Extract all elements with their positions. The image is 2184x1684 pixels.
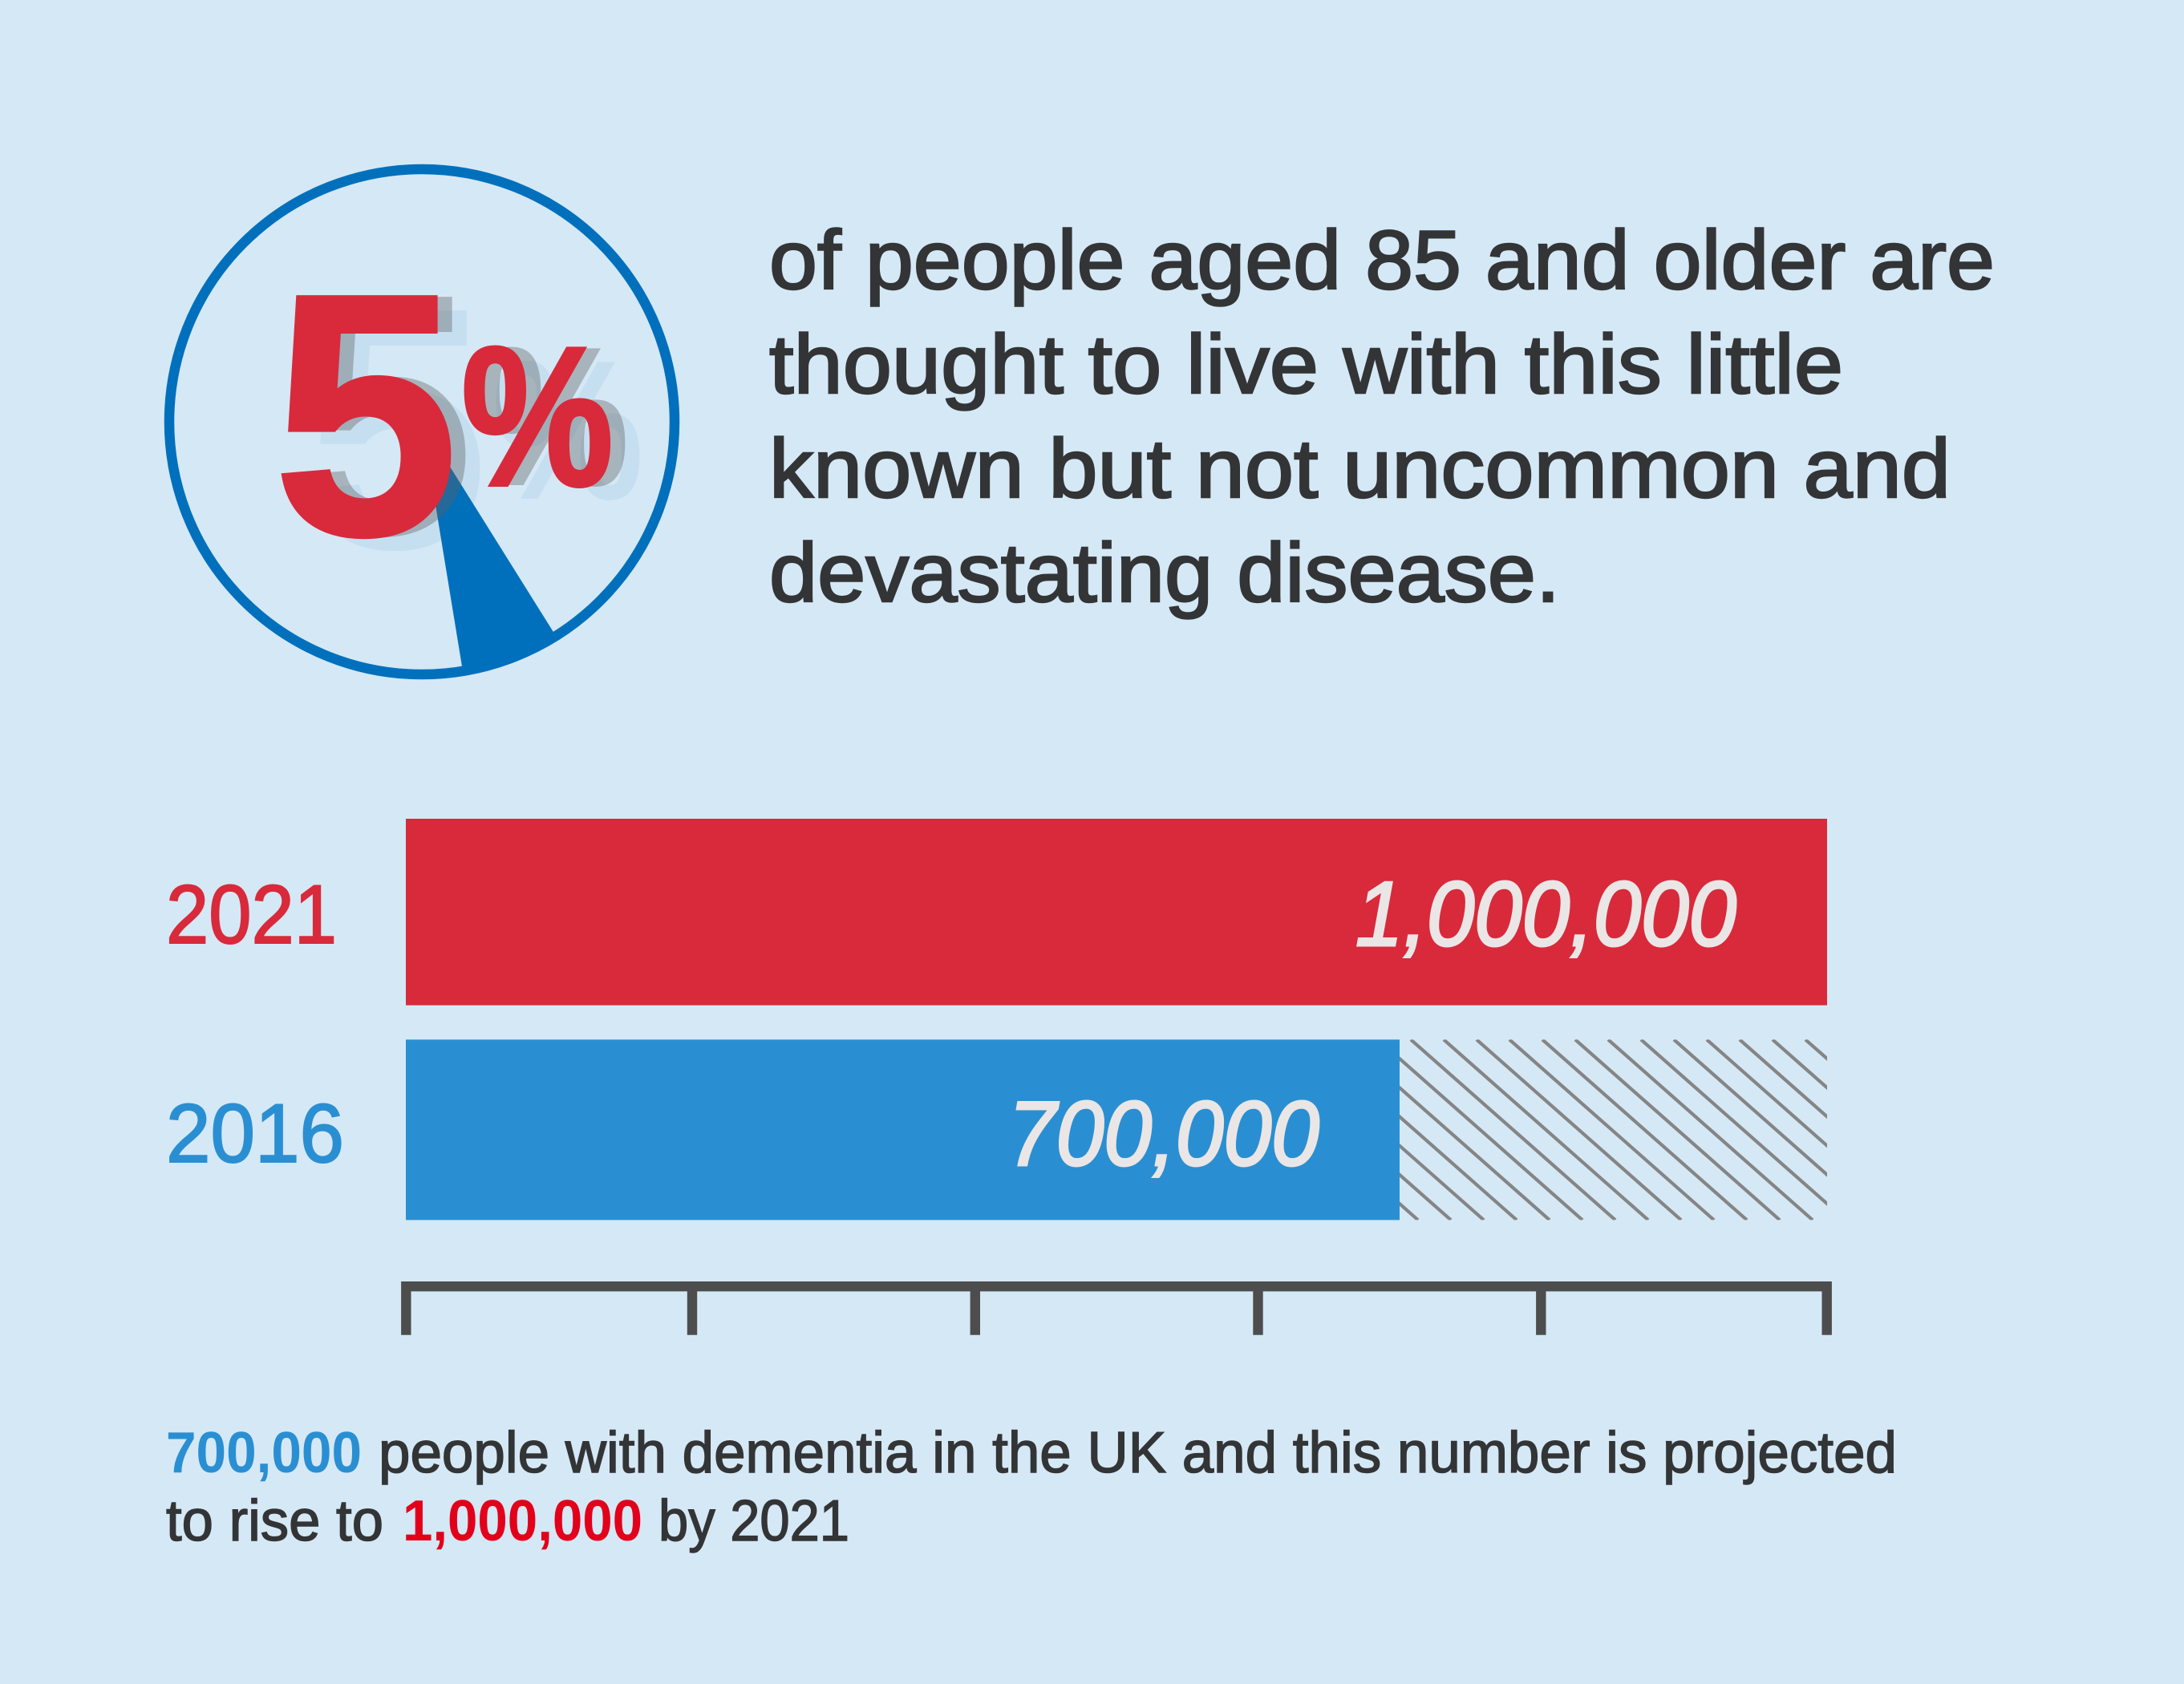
5% figure: 5 [273, 223, 459, 608]
caption line 2 end: by 2021 [658, 1489, 849, 1553]
projected increase hatching [1400, 1039, 1827, 1220]
value: 700,000: 700,000 [1008, 1083, 1319, 1185]
5% light blue shadow [303, 237, 644, 621]
caption highlight: 1,000,000: 1,000,000 [403, 1489, 642, 1553]
bar: 2021 [406, 819, 1827, 1006]
headline text: of people aged 85 and older are [769, 214, 1995, 307]
value: 1,000,000: 1,000,000 [1355, 864, 1736, 965]
5% light blue shadow: % [492, 318, 644, 541]
circle ring [169, 169, 675, 674]
headline text: devastating disease. [769, 527, 1560, 620]
bar chart [166, 819, 2010, 1335]
headline text: thought to live with this little [769, 318, 1843, 411]
5% figure [273, 223, 614, 608]
label: 2021: 2021 [166, 868, 337, 961]
pie wedge [422, 422, 556, 671]
infographic canvas [164, 164, 1992, 1553]
caption highlight: 700,000: 700,000 [166, 1421, 362, 1485]
label: 2016: 2016 [166, 1087, 344, 1180]
panel: 5% pie chart [169, 169, 675, 674]
headline text: known but not uncommon and [769, 423, 1951, 516]
bar: 2016 [406, 1039, 1400, 1220]
5% grey shadow [289, 223, 630, 608]
caption line 2 start: to rise to [166, 1489, 383, 1553]
5% grey shadow: % [477, 305, 630, 528]
caption line 1: people with dementia in the UK and this number is projected [379, 1421, 1897, 1485]
5% figure: % [461, 305, 614, 528]
5% grey shadow: 5 [289, 223, 475, 608]
headline text [769, 214, 1995, 620]
axis [406, 1286, 1827, 1335]
caption [166, 1421, 1897, 1553]
5% light blue shadow: 5 [303, 237, 489, 621]
